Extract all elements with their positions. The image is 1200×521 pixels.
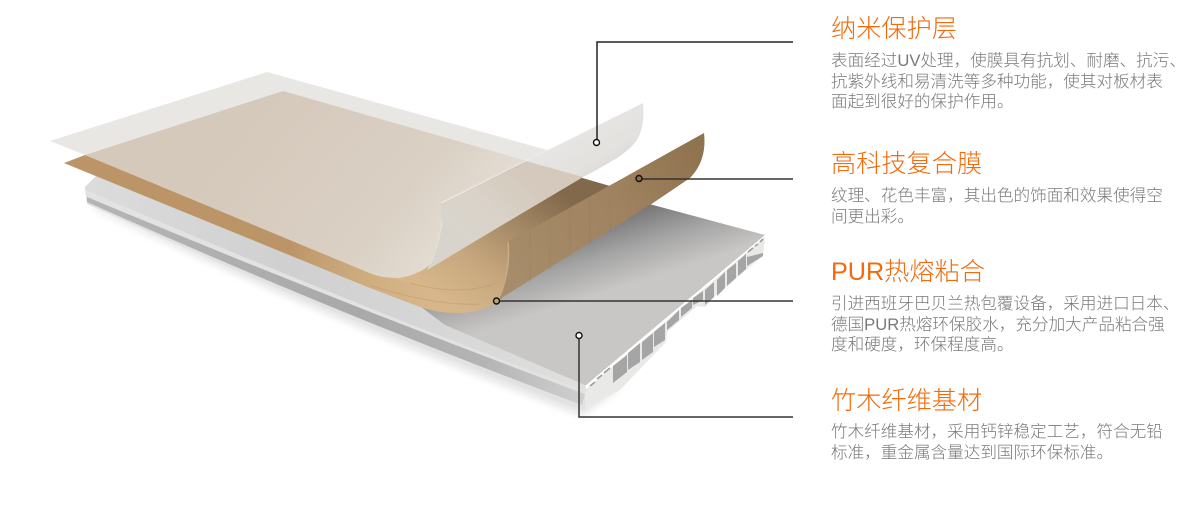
bottom backing layer xyxy=(85,190,587,410)
description: 表面经过UV处理，使膜具有抗划、耐磨、抗污、 xyxy=(831,51,1186,70)
perforation dashes xyxy=(590,239,763,386)
leader line: nano layer xyxy=(594,42,793,146)
description: 纹理、花色丰富，其出色的饰面和效果使得空 xyxy=(831,186,1163,205)
description xyxy=(831,422,1163,462)
left brown edge xyxy=(64,155,445,313)
base board xyxy=(85,120,765,409)
board top face xyxy=(97,120,765,386)
description: 度和硬度，环保程度高。 xyxy=(831,335,1014,354)
hollow cells xyxy=(613,253,763,383)
description xyxy=(831,51,1186,111)
light lower lip xyxy=(85,190,587,410)
section: PUR hot-melt bonding xyxy=(831,258,1179,354)
board front strip xyxy=(85,175,587,392)
vertical wood grain xyxy=(530,176,630,283)
description: 抗紫外线和易清洗等多种功能，使其对板材表 xyxy=(831,72,1163,90)
section: bamboo fibre substrate xyxy=(831,387,1163,462)
description xyxy=(831,294,1179,354)
film curl xyxy=(427,103,643,270)
wood grain xyxy=(372,283,495,304)
section: composite film xyxy=(831,150,1163,226)
film flat sheet xyxy=(50,72,547,165)
transparent nano protective film xyxy=(50,72,643,278)
heading: 高科技复合膜 xyxy=(831,150,982,178)
description: 间更出彩。 xyxy=(831,206,914,226)
brown decor film layer xyxy=(64,91,704,313)
description: 德国PUR热熔环保胶水，充分加大产品粘合强 xyxy=(831,314,1165,334)
beige seen through curl xyxy=(427,161,583,270)
leader line: composite film xyxy=(636,176,793,182)
section: nano protective layer xyxy=(831,15,1186,111)
heading: 纳米保护层 xyxy=(831,15,957,43)
board end wall xyxy=(585,237,765,409)
curl highlight edge xyxy=(441,150,547,203)
description: 面起到很好的保护作用。 xyxy=(831,92,1014,111)
leader line: PUR adhesive xyxy=(494,298,793,304)
shaded band xyxy=(87,197,585,405)
leader line: base board xyxy=(576,332,793,417)
heading: PUR热熔粘合 xyxy=(831,258,985,286)
description xyxy=(831,186,1163,226)
ground shadow xyxy=(90,204,625,416)
beige surface seen through film xyxy=(85,91,583,278)
curled wood back xyxy=(497,133,704,302)
heading: 竹木纤维基材 xyxy=(831,387,982,415)
curl rim xyxy=(497,242,509,302)
description: 引进西班牙巴贝兰热包覆设备，采用进口日本、 xyxy=(831,294,1179,313)
description: 标准，重金属含量达到国际环保标准。 xyxy=(831,442,1113,462)
description: 竹木纤维基材，采用钙锌稳定工艺，符合无铅 xyxy=(831,422,1163,441)
film wood face xyxy=(64,91,610,313)
